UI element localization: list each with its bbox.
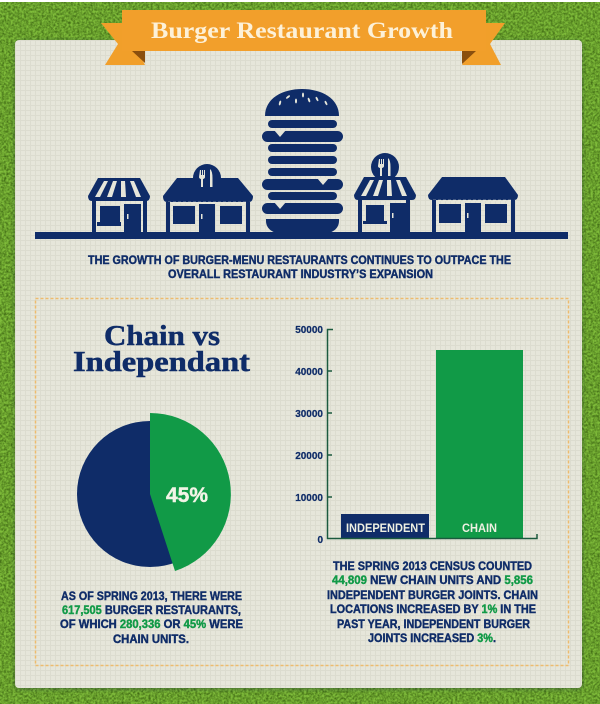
y axis labels: 0 [317, 535, 323, 546]
heading: chain vs independant: Independant [73, 346, 250, 378]
left caption: AS OF SPRING 2013, THERE WERE [61, 591, 242, 603]
y axis labels: 20000 [295, 451, 323, 462]
right caption [327, 561, 538, 645]
y axis labels: 30000 [295, 409, 323, 420]
right caption: INDEPENDENT BURGER JOINTS. CHAIN [327, 590, 538, 602]
dashed content frame [36, 298, 568, 666]
independent bar: INDEPENDENT [346, 523, 425, 535]
heading: chain vs independant: Chain vs [104, 320, 220, 352]
chain bar: CHAIN [462, 523, 497, 535]
icon: striped shop 1 [88, 178, 150, 232]
heading: chain vs independant [73, 320, 250, 378]
right caption: LOCATIONS INCREASED BY 1% IN THE [330, 604, 536, 616]
right caption: THE SPRING 2013 CENSUS COUNTED [333, 561, 532, 573]
right caption: 44,809 NEW CHAIN UNITS AND 5,856 [332, 575, 533, 587]
title: Burger Restaurant Growth [151, 18, 453, 43]
pie chart: 45 percent chain: 45% [166, 484, 208, 507]
y axis labels [295, 325, 323, 546]
right caption: PAST YEAR, INDEPENDENT BURGER [337, 619, 531, 631]
left caption: 617,505 BURGER RESTAURANTS, [62, 605, 241, 617]
icon: striped shop 3 with fork and knife sign [354, 153, 416, 232]
right caption: JOINTS INCREASED 3%. [368, 633, 496, 645]
chain bar [436, 350, 523, 539]
y axis labels: 10000 [295, 493, 323, 504]
axes [327, 330, 537, 538]
y axis labels: 50000 [295, 325, 323, 336]
bar chart [295, 325, 537, 546]
left caption [60, 591, 243, 646]
intro text: OVERALL RESTAURANT INDUSTRY’S EXPANSION [168, 269, 433, 281]
pie chart: 45 percent chain [77, 413, 231, 571]
title ribbon [101, 10, 505, 65]
left caption: OF WHICH 280,336 OR 45% WERE [60, 619, 243, 631]
icon: shop 2 with fork and knife sign [163, 164, 253, 232]
intro text [88, 255, 511, 281]
intro text: THE GROWTH OF BURGER-MENU RESTAURANTS CONTINUES TO OUTPACE THE [88, 255, 511, 267]
icon: giant burger [262, 89, 343, 233]
icon: shop 4 [428, 177, 518, 232]
left caption: CHAIN UNITS. [113, 634, 189, 646]
illustration: street of restaurants with giant burger [35, 89, 568, 239]
independent bar [341, 514, 429, 539]
y axis labels: 40000 [295, 367, 323, 378]
ground line [35, 232, 568, 239]
